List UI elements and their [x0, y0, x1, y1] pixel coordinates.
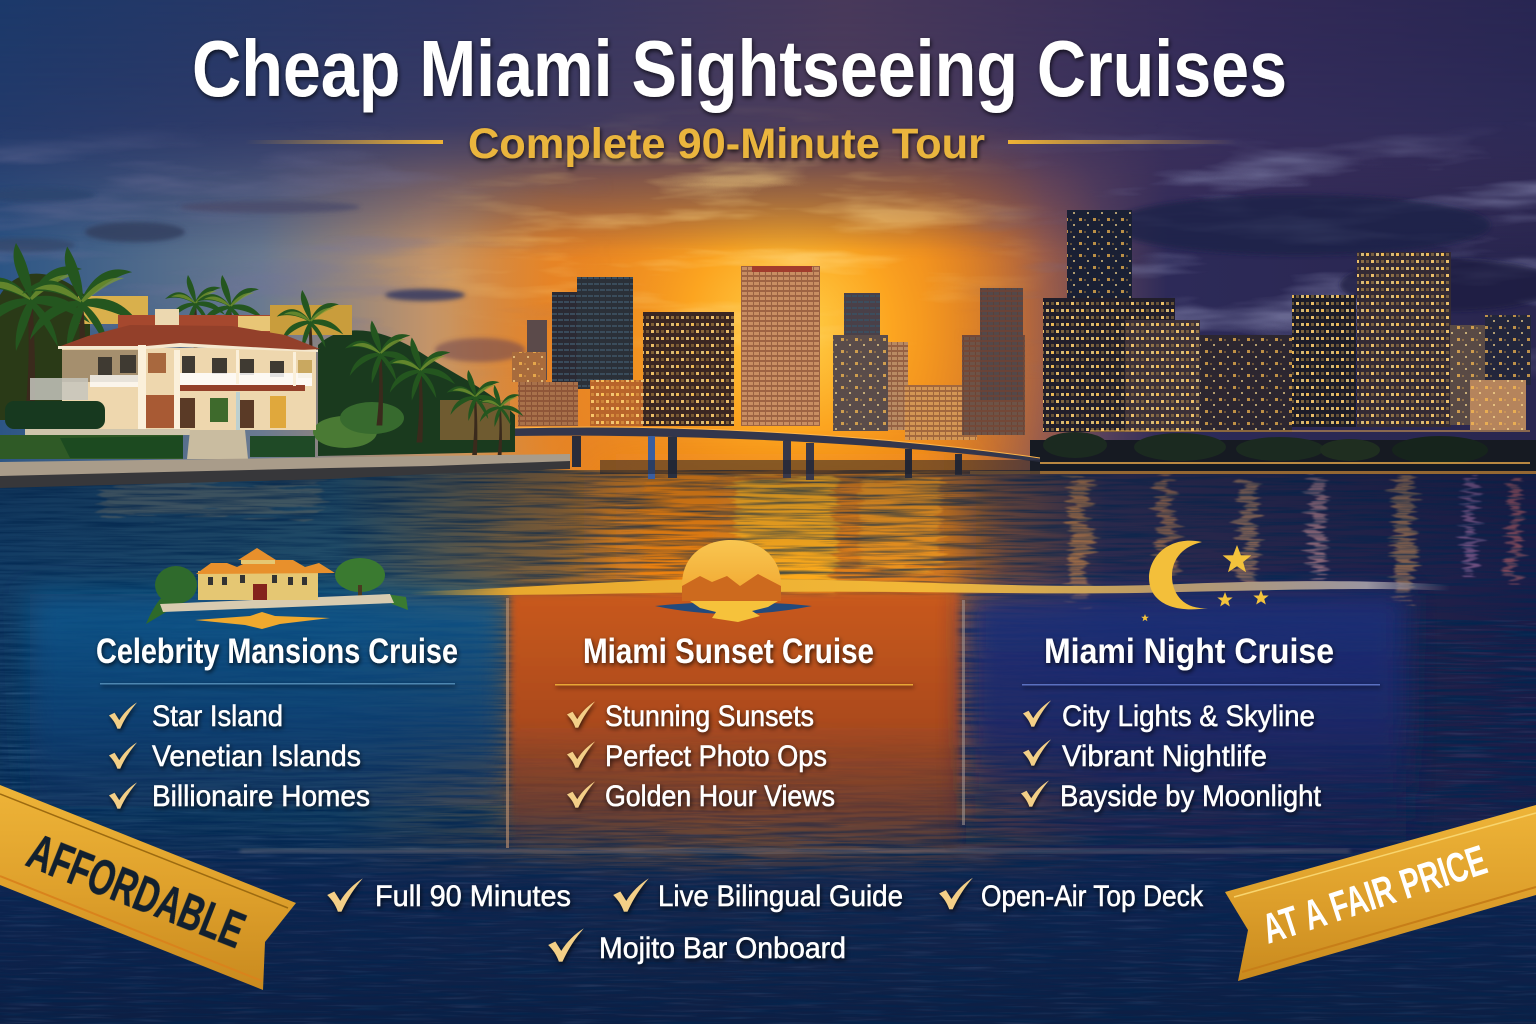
column: sunset cruise: Golden Hour Views	[605, 780, 835, 813]
seawall	[0, 454, 570, 488]
column: celebrity mansions: Celebrity Mansions Cruise	[96, 632, 458, 671]
column: night cruise: Vibrant Nightlife	[1062, 740, 1267, 773]
waterfront trees and lights	[970, 430, 1536, 474]
column: sunset cruise: Stunning Sunsets	[605, 700, 814, 733]
bridge	[512, 427, 1040, 480]
panel: sunset	[510, 592, 960, 848]
divider above features	[240, 849, 1350, 853]
column: sunset cruise: Perfect Photo Ops	[605, 740, 827, 773]
column: night cruise: Miami Night Cruise	[1044, 632, 1334, 671]
feature list: Full 90 Minutes	[375, 880, 571, 913]
subtitle with rules	[245, 120, 1236, 168]
reflections	[100, 478, 1520, 608]
column: sunset cruise: Miami Sunset Cruise	[583, 632, 874, 671]
skyline	[512, 210, 1531, 440]
title: Cheap Miami Sightseeing Cruises	[192, 24, 1287, 113]
ribbon: affordable	[0, 785, 296, 990]
column: celebrity mansions: Billionaire Homes	[152, 780, 370, 813]
column: celebrity mansions: Star Island	[152, 700, 283, 733]
column: night cruise: City Lights & Skyline	[1062, 700, 1315, 733]
feature list: Open-Air Top Deck	[981, 880, 1204, 913]
column dividers	[506, 598, 965, 848]
water	[0, 470, 1536, 1024]
mansion	[0, 309, 320, 459]
feature list: Live Bilingual Guide	[658, 880, 903, 913]
feature list	[327, 878, 1204, 965]
ribbon: affordable: AFFORDABLE	[20, 823, 253, 959]
feature list: Mojito Bar Onboard	[599, 932, 846, 965]
gold curved band	[410, 579, 1450, 595]
clouds	[0, 124, 1536, 372]
column: celebrity mansions	[96, 632, 458, 813]
sky background	[0, 0, 1536, 500]
column: night cruise: Bayside by Moonlight	[1060, 780, 1322, 813]
column: sunset cruise	[555, 632, 913, 813]
subtitle with rules: Complete 90-Minute Tour	[468, 120, 985, 168]
column: night cruise	[1021, 632, 1380, 813]
column: celebrity mansions: Venetian Islands	[152, 740, 361, 773]
panel: night	[966, 594, 1406, 844]
foliage behind the mansion	[0, 243, 523, 456]
icon: sunset	[655, 540, 812, 622]
panel: celebrity mansions	[30, 594, 506, 844]
icon: moon and stars	[1141, 541, 1269, 621]
icon: island mansion	[146, 548, 408, 629]
